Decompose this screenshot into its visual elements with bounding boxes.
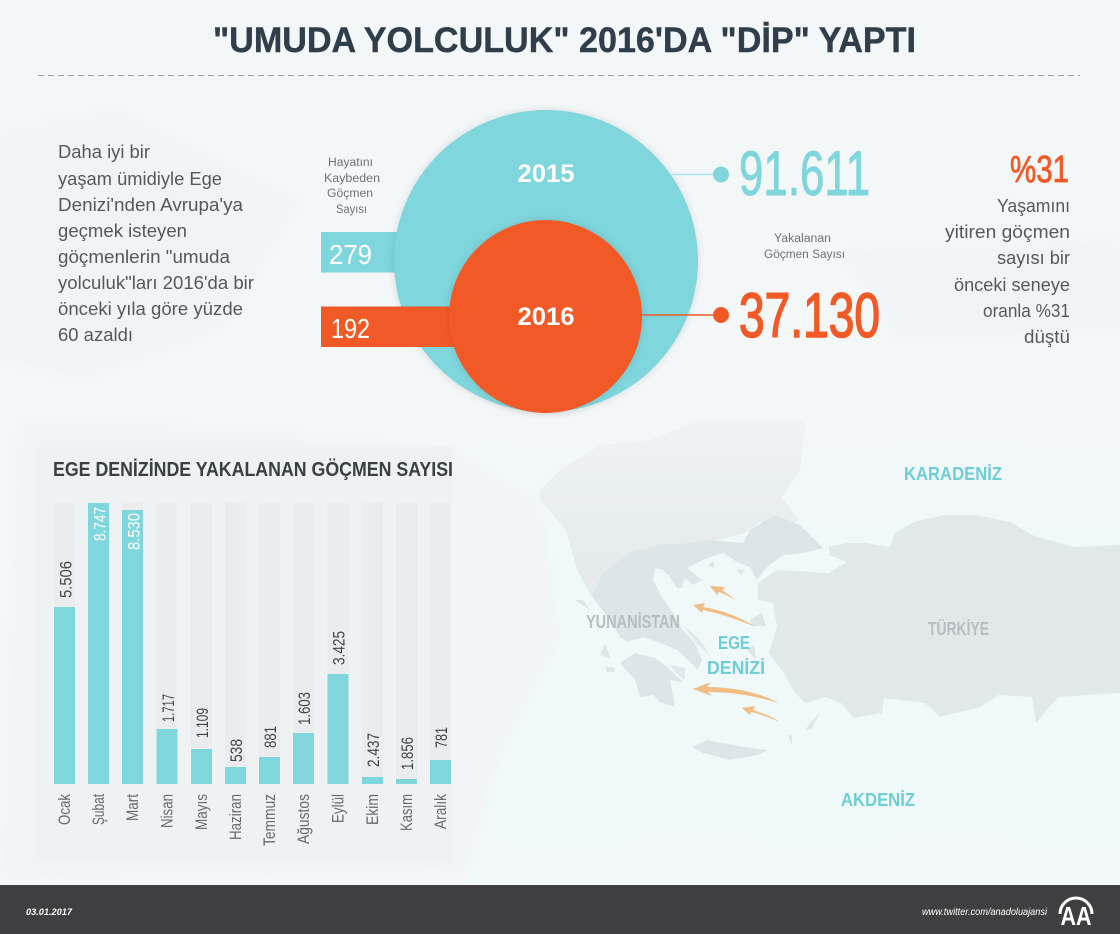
intro text block: önceki yıla göre yüzde [58,299,243,319]
callout: percent drop: %31 [1010,149,1069,191]
bar: deaths 2016: 192 [331,313,370,344]
month labels: Ağustos [294,794,313,844]
month labels: Ocak [55,794,74,825]
map: Aegean region [540,420,1120,760]
callout: percent drop: düştü [1024,327,1070,347]
caption: captured migrants: Göçmen Sayısı [764,249,845,261]
month labels: Şubat [89,794,108,825]
intro text block: Daha iyi bir [58,142,150,162]
land: Turkey [758,515,1120,723]
intro text block: yolculuk"ları 2016'da bir [58,273,254,293]
label: Türkiye: TÜRKİYE [928,619,989,639]
callout: percent drop: Yaşamını [997,196,1070,216]
caption: deaths: Kaybeden [324,173,380,185]
label: Yunanistan: YUNANİSTAN [586,612,680,632]
intro text block: göçmenlerin "umuda [58,247,231,267]
chart heading: EGE DENİZİNDE YAKALANAN GÖÇMEN SAYISI [53,458,453,481]
callout: percent drop: sayısı bir [997,248,1070,268]
land: Balkans [540,420,806,597]
land: Evia and Attica [670,625,710,680]
bar: deaths 2016 [321,306,461,347]
circle: 2015 [394,110,698,412]
label: Akdeniz: AKDENİZ [841,790,915,810]
connector and dot: 2016 [640,308,728,322]
number: 37.130: 37.130 [739,281,880,351]
intro text block: 60 azaldı [58,325,133,345]
date: 03.01.2017 [26,907,73,917]
month labels: Mart [123,794,142,821]
caption: deaths: Hayatını [328,157,373,169]
social link: www.twitter.com/anadoluajansi [922,907,1048,918]
connector and dot: 2015 [670,167,728,182]
circle: 2015: 2015 [518,160,575,188]
month labels: Nisan [158,794,176,828]
land: Peloponnese [620,653,683,707]
bar tracks [54,503,451,784]
value labels: 1.856 [398,737,417,770]
value labels: 5.506 [56,561,76,598]
land: Thrace and Northern Greece [592,515,823,670]
callout: percent drop: yitiren göçmen [945,222,1070,242]
caption: deaths [324,157,380,216]
bar: deaths 2015 [321,232,401,272]
intro text block: Denizi'nden Avrupa'ya [58,195,244,215]
caption: deaths: Sayısı [336,204,367,216]
month labels: Aralık [431,794,450,829]
intro text block: geçmek isteyen [58,221,187,241]
panel: monthly bar chart [38,447,453,862]
intro text block [58,142,254,345]
value labels: 881 [261,726,280,748]
intro text block: yaşam ümidiyle Ege [58,169,222,189]
bars [54,503,451,784]
land: Aegean islands [575,561,820,745]
footer bar [0,885,1120,934]
caption: captured migrants [764,233,845,261]
value labels: 3.425 [330,631,348,665]
icon: AA logo: AA [1060,901,1092,931]
label: Karadeniz: KARADENİZ [904,464,1002,484]
value labels: 1.717 [159,694,178,722]
migration arrows [693,586,780,722]
month labels [55,794,450,846]
month labels: Ekim [363,794,382,825]
value labels [56,507,451,770]
callout: percent drop [945,149,1070,347]
month labels: Eylül [328,794,348,823]
value labels: 8.747 [90,507,110,541]
month labels: Haziran [226,794,245,840]
value labels: 2.437 [364,733,383,767]
label: Ege Denizi: EGE [718,633,750,653]
caption: deaths: Göçmen [327,188,373,200]
value labels: 1.603 [295,692,314,725]
bar: deaths 2015: 279 [329,239,372,270]
month labels: Mayıs [192,794,211,830]
callout: percent drop: önceki seneye [954,275,1070,295]
value labels: 1.109 [193,708,212,738]
circle: 2016: 2016 [518,303,574,331]
land: Crete [692,740,768,760]
callout: percent drop: oranla %31 [983,301,1070,321]
value labels: 781 [432,727,451,748]
month labels: Kasım [397,794,416,831]
value labels: 8.530 [124,513,144,550]
value labels: 538 [227,739,246,762]
circle: 2016 [449,220,642,413]
label: Ege Denizi [707,633,765,678]
number: 91.611: 91.611 [739,139,870,209]
label: Ege Denizi: DENİZİ [707,658,765,678]
month labels: Temmuz [260,794,279,846]
title: "UMUDA YOLCULUK" 2016'DA "DİP" YAPTI [213,21,916,60]
caption: captured migrants: Yakalanan [774,233,831,245]
